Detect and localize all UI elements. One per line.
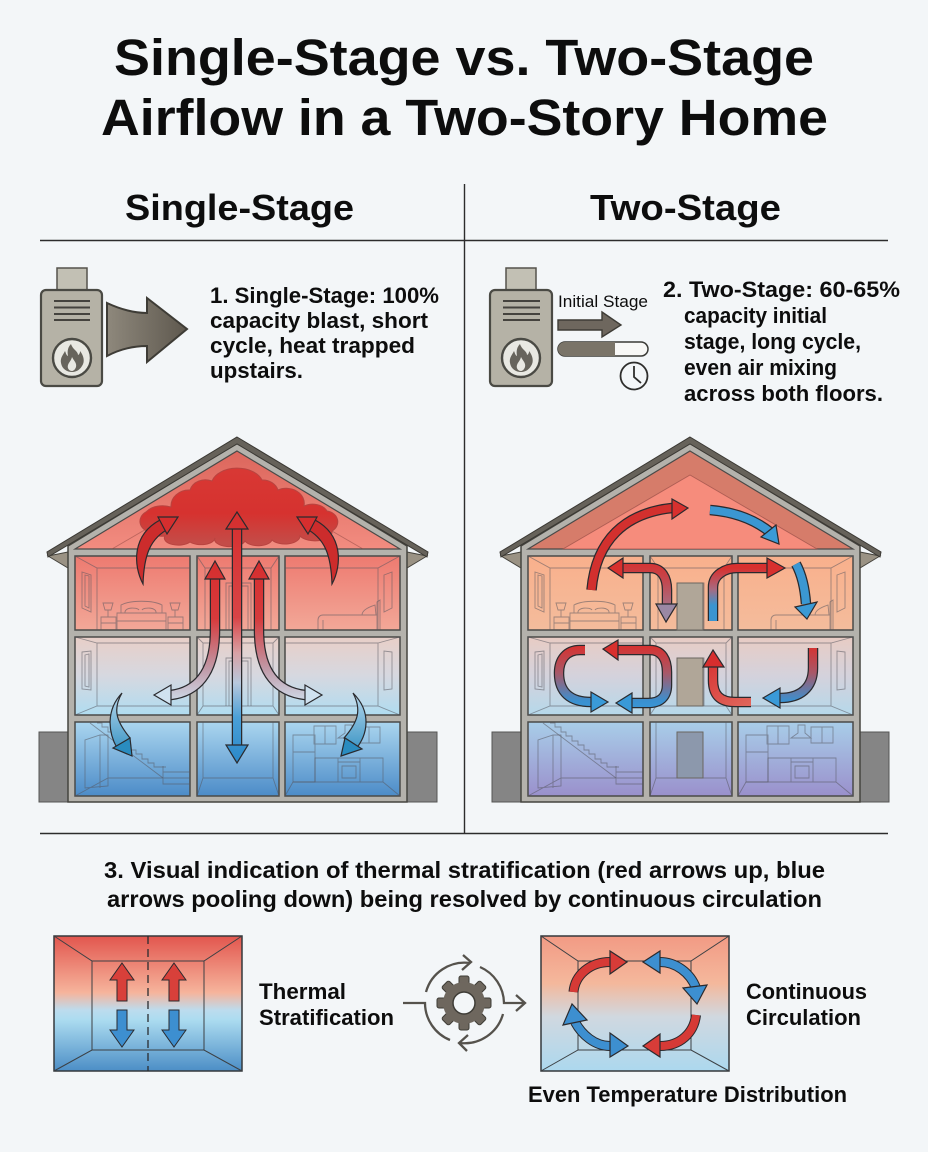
arrow: single-stage full blast <box>107 298 187 362</box>
text: two-stage description: capacity initial <box>684 303 827 328</box>
column divider lines <box>40 184 888 834</box>
house structure <box>47 437 428 802</box>
ground <box>39 732 437 802</box>
arrow: right branch <box>249 561 322 705</box>
icon: clock <box>620 362 648 390</box>
heading: Two-Stage: Two-Stage <box>590 187 781 228</box>
title: Single-Stage vs. Two-Stage <box>114 29 814 86</box>
arrow: red arc to attic <box>592 499 688 590</box>
label: thermal stratification: Thermal <box>259 979 346 1004</box>
house structure <box>500 437 881 802</box>
arrow: bottom-right red <box>643 1015 696 1057</box>
arrow: left branch <box>154 561 225 705</box>
text: section 3 caption <box>104 857 825 912</box>
label: continuous circulation: Continuous <box>746 979 867 1004</box>
ground <box>492 732 889 802</box>
arrow: left room loop <box>559 650 608 712</box>
arrow: blue down right room <box>795 564 817 619</box>
arrow: heat rising right <box>297 517 338 584</box>
text: two-stage description: stage, long cycle, <box>684 329 861 354</box>
text: section 3 caption: 3. Visual indication of thermal stratification (red arrows up, blue <box>104 857 825 883</box>
arrow: top-left red <box>574 951 627 992</box>
panel: single-stage house cutaway <box>39 437 437 802</box>
text: two-stage description: even air mixing <box>684 355 837 380</box>
arrow: right room sweep <box>763 648 813 708</box>
arrow: upstairs up and right <box>713 558 785 621</box>
arrow: bottom-left blue <box>563 1004 628 1057</box>
text: section 3 caption: arrows pooling down) being resolved by continuous circulation <box>107 886 822 912</box>
label: continuous circulation <box>746 979 867 1030</box>
arrow: blue arc down from attic <box>710 510 779 544</box>
text: two-stage description: 2. Two-Stage: 60-65% <box>663 277 900 302</box>
label: thermal stratification <box>259 979 394 1030</box>
arrow: heat rising left <box>137 517 178 584</box>
arrow: red rise to hall <box>703 650 751 702</box>
arrow: mid room loop <box>603 640 667 713</box>
icon: gear with circulation arrows <box>403 955 525 1051</box>
arrows: warm air up <box>110 963 186 1001</box>
text: single-stage description: capacity blast, short <box>210 308 429 333</box>
arrow: upstairs left and down <box>608 558 677 622</box>
text: single-stage description: cycle, heat trapped <box>210 333 415 358</box>
text: single-stage description: upstairs. <box>210 358 303 383</box>
arrow: cool air pooling right <box>341 693 366 756</box>
arrow: central supply up and down <box>226 512 248 763</box>
heading: Single-Stage: Single-Stage <box>125 187 354 228</box>
label: even temperature distribution: Even Temperature Distribution <box>528 1082 847 1107</box>
icon: two-stage furnace <box>490 268 552 386</box>
arrow: cool air pooling left <box>110 693 132 756</box>
text: single-stage description <box>210 283 439 383</box>
title: Airflow in a Two-Story Home <box>101 89 828 146</box>
diagram: thermal stratification room <box>54 936 242 1071</box>
diagram: continuous circulation room <box>541 936 729 1071</box>
text: two-stage description: across both floors. <box>684 381 883 406</box>
icon: single-stage furnace <box>41 268 102 386</box>
text: single-stage description: 1. Single-Stage: 100% <box>210 283 439 308</box>
progress bar: initial stage <box>558 342 648 356</box>
panel: two-stage house cutaway <box>492 437 889 802</box>
title <box>101 29 828 146</box>
label: initial stage: Initial Stage <box>558 293 648 311</box>
text: two-stage description <box>663 277 900 406</box>
label: continuous circulation: Circulation <box>746 1005 861 1030</box>
heat cloud trapped in attic <box>140 468 338 547</box>
arrow: initial stage airflow <box>558 312 621 337</box>
arrows: cool air down <box>110 1010 186 1047</box>
arrow: top-right blue <box>643 951 707 1004</box>
label: thermal stratification: Stratification <box>259 1005 394 1030</box>
